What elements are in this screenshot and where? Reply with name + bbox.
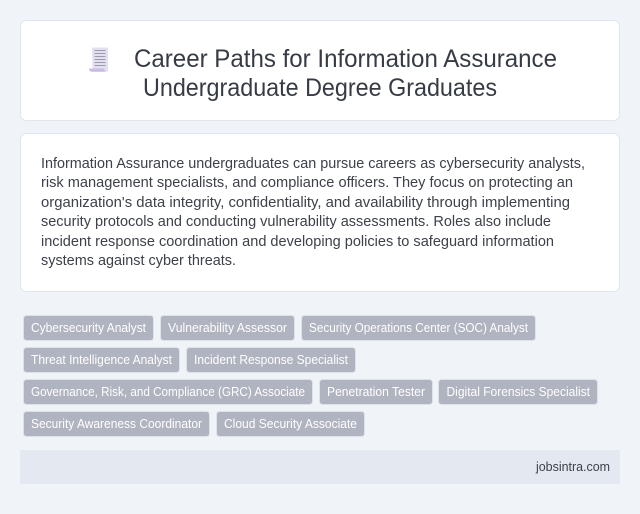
- tag: Cloud Security Associate: [216, 412, 364, 436]
- text block: description: systems against cyber threats.: [41, 253, 236, 269]
- text block: description: security protocols and conducting vulnerability assessments. Roles also include: [41, 214, 551, 230]
- tags: career paths: [24, 316, 598, 436]
- title: Career Paths for Information Assurance: [134, 45, 557, 73]
- title: Undergraduate Degree Graduates: [143, 74, 497, 102]
- tag: Vulnerability Assessor: Vulnerability Assessor: [168, 321, 287, 335]
- text block: description: incident response coordination and developing policies to safeguard information: [41, 234, 554, 250]
- text block: description: [41, 156, 585, 269]
- tag: Security Awareness Coordinator: Security Awareness Coordinator: [31, 417, 202, 431]
- tag: Penetration Tester: Penetration Tester: [327, 385, 425, 399]
- tag: Threat Intelligence Analyst: [24, 348, 180, 372]
- tag: GRC Associate: [24, 380, 312, 404]
- text block: description: risk management specialists, and compliance officers. They focus on protecting an: [41, 175, 573, 191]
- footer text: jobsintra.com: [535, 460, 610, 474]
- tag: Cybersecurity Analyst: [24, 316, 154, 340]
- title: [134, 45, 557, 102]
- tag: Incident Response Specialist: Incident Response Specialist: [194, 353, 349, 367]
- tag: SOC Analyst: Security Operations Center (SOC) Analyst: [309, 321, 528, 335]
- text block: description: Information Assurance undergraduates can pursue careers as cybersecurity analysts,: [41, 156, 585, 172]
- tag: Incident Response Specialist: [186, 348, 356, 372]
- tag: Vulnerability Assessor: [160, 316, 294, 340]
- tag: Threat Intelligence Analyst: Threat Intelligence Analyst: [31, 353, 172, 367]
- tag: Penetration Tester: [320, 380, 432, 404]
- tag: Cloud Security Associate: Cloud Security Associate: [224, 417, 357, 431]
- tag: SOC Analyst: [302, 316, 536, 340]
- tag: Cybersecurity Analyst: Cybersecurity Analyst: [31, 321, 147, 335]
- tag: Digital Forensics Specialist: Digital Forensics Specialist: [446, 385, 591, 399]
- text block: description: organization's data integrity, confidentiality, and availability through implementing: [41, 195, 570, 211]
- footer bar: [20, 450, 620, 484]
- tag: GRC Associate: Governance, Risk, and Compliance (GRC) Associate: [31, 385, 305, 399]
- panel: description: [20, 134, 620, 292]
- icon: document: [89, 48, 108, 72]
- panel: header: [20, 20, 620, 120]
- tag: Security Awareness Coordinator: [24, 412, 210, 436]
- tag: Digital Forensics Specialist: [438, 380, 598, 404]
